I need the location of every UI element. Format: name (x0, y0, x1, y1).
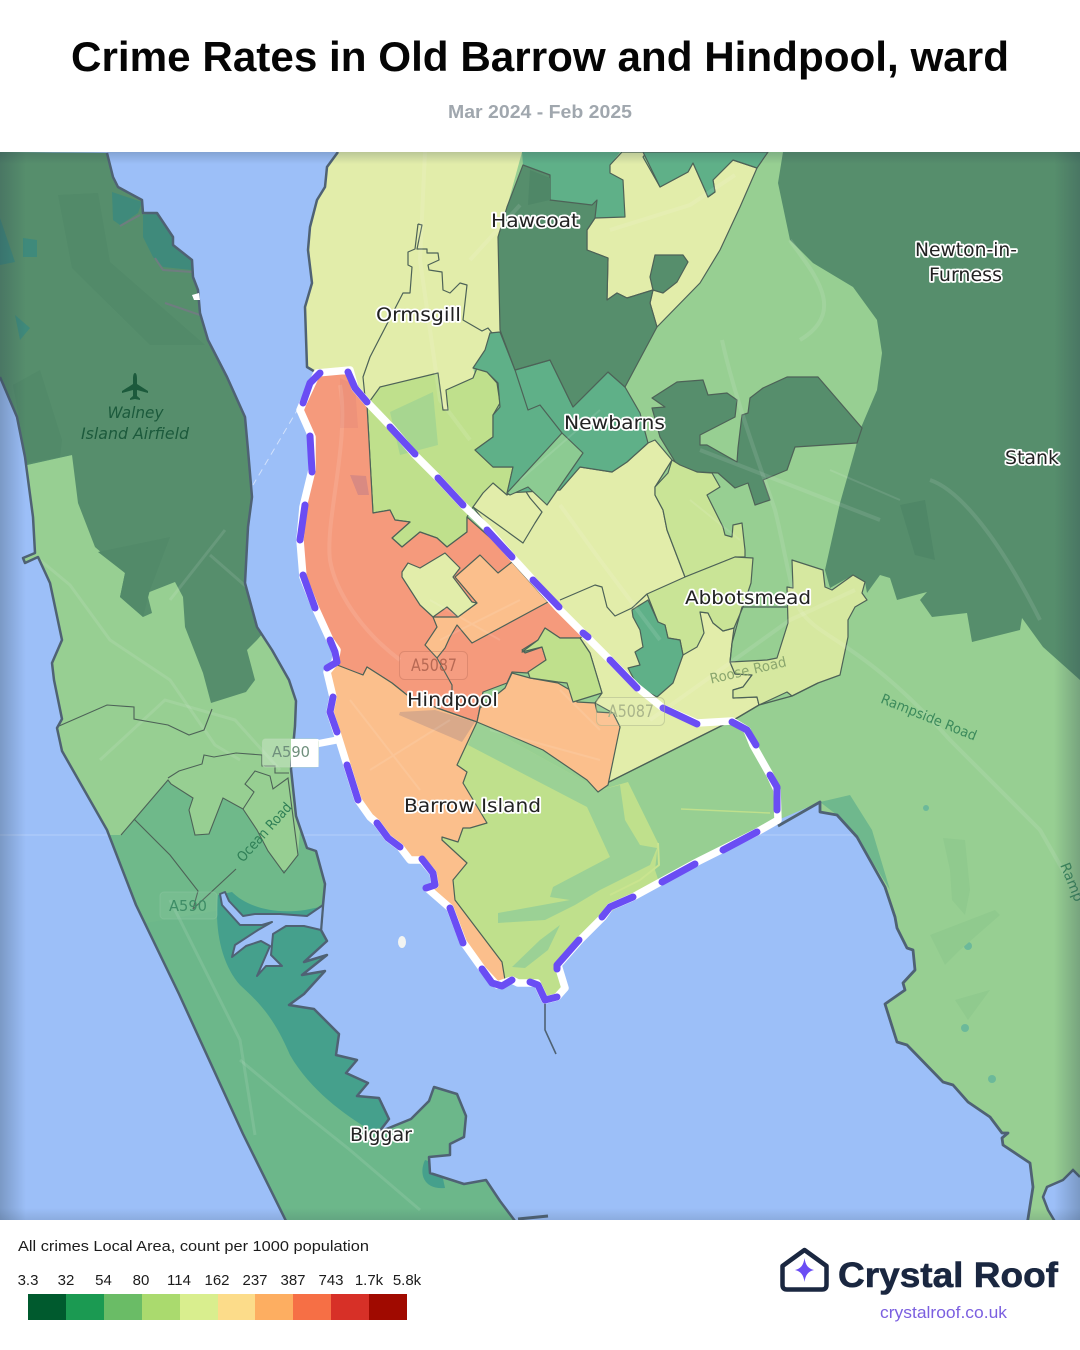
water inlet on southern Walney (220, 892, 323, 976)
darker field patches (780, 838, 1000, 1020)
zone: teal coastal patches (112, 192, 142, 225)
water background (0, 152, 1080, 1220)
zone: teal Newbarns (473, 332, 648, 493)
legend values: 387 (280, 1272, 306, 1289)
legend title: All crimes Local Area, count per 1000 population (18, 1238, 369, 1255)
place label: Hawcoat: Hawcoat (491, 210, 579, 232)
zone: north pale yellow (587, 152, 757, 327)
road shield: A5087 west (400, 652, 468, 680)
roads on mainland (329, 152, 1080, 900)
zone: medium green south of Walney (110, 781, 320, 870)
place label: Hindpool: Hindpool (407, 689, 498, 711)
white islet on Walney coast (192, 293, 200, 300)
zone: Hawcoat dark green (498, 165, 657, 407)
small islet (398, 936, 406, 948)
zone: Abbotsmead yellow-green (647, 557, 753, 655)
purple dashes (300, 372, 777, 1000)
icon: airport plane (122, 373, 148, 400)
zone: Walney central light green (24, 455, 300, 870)
pier line (545, 1003, 556, 1054)
zone: docks darker green (468, 722, 657, 923)
zone: dark green pocket (650, 255, 688, 293)
zone: teal north strip (643, 152, 768, 197)
mainland south-east coastline (778, 802, 1033, 1225)
mainland north coastline (305, 152, 338, 373)
patch: railway block (399, 710, 475, 742)
legend values: 162 (204, 1272, 230, 1289)
zone: south-east dark teal shore (820, 795, 890, 890)
zone: teal north (522, 152, 625, 218)
choropleth map (0, 152, 1080, 1227)
zone: Abbotsmead east pale (730, 560, 867, 705)
zone: orange south-west (331, 665, 506, 981)
road label: Rampside Road: Rampside Road (878, 691, 979, 744)
road shield: A590 bridge: A590 (272, 743, 310, 761)
place label: Biggar: Biggar (350, 1124, 412, 1146)
place label: Newbarns: Newbarns (564, 412, 665, 434)
zone: orange central (425, 555, 548, 658)
legend values (18, 1272, 422, 1289)
zone: Hindpool yellow-green block (522, 628, 602, 702)
zone: pale block inside red (402, 553, 477, 617)
roads on Walney (40, 530, 420, 1210)
zone: Ormsgill pale yellow (300, 152, 522, 420)
legend colour scale (28, 1294, 407, 1320)
label: Walney Island Airfield (81, 403, 190, 443)
zone: teal south of Abbotsmead (628, 600, 683, 697)
zone: Barrow Island yellow-green (442, 722, 660, 1000)
zone: orange south-east (477, 673, 620, 792)
legend values: 80 (133, 1272, 149, 1289)
legend (18, 1238, 422, 1320)
south dividing line (603, 683, 818, 785)
place label: Newton-in-Furness: Newton-in- (915, 239, 1017, 261)
panel: Walney Island (0, 152, 560, 1227)
legend values: 114 (167, 1272, 191, 1289)
ward outline white (300, 370, 778, 1000)
zone: Biggar bay teal patch (422, 1160, 445, 1188)
map edge vignette (0, 152, 1080, 1220)
place label: Newton-in-Furness: Furness (929, 264, 1002, 286)
zone: Abbotsmead west yellow-green (655, 460, 745, 577)
zone: teal sands on southern shore (217, 892, 395, 1130)
zone: dark green east of Newbarns (652, 377, 862, 505)
legend values: 32 (58, 1272, 74, 1289)
legend values: 54 (95, 1272, 112, 1289)
road label: Ocean Road: Ocean Road (234, 800, 295, 866)
road shield: A5087 east (596, 698, 664, 726)
place label: Ormsgill: Ormsgill (376, 304, 461, 326)
logo wordmark: Crystal Roof (838, 1256, 1058, 1295)
road label: Roose Road: Roose Road (708, 654, 788, 688)
zone: central pale yellow east of the diagonal (473, 440, 759, 785)
road shield: A5087 east: A5087 (608, 702, 654, 721)
Walney Island coastline (107, 153, 518, 1225)
title: Crime Rates in Old Barrow and Hindpool, ward (71, 33, 1009, 80)
place label: Stank: Stank (1005, 447, 1059, 469)
place label: Abbotsmead: Abbotsmead (685, 587, 811, 609)
icon: house with star (782, 1250, 826, 1290)
ward boundary: white line with purple dashes (300, 370, 778, 1000)
label: Walney Island Airfield: Walney (108, 403, 164, 422)
road shield: A590 bridge (262, 739, 318, 767)
bridge road to Walney (316, 740, 337, 744)
legend values: 743 (318, 1272, 344, 1289)
zone: Walney north dark green (0, 152, 261, 703)
road shield: A590 south (160, 892, 217, 919)
zone: north-east dark green (778, 152, 1080, 680)
label: Walney Island Airfield: Island Airfield (81, 424, 190, 443)
place label: Newton-in-Furness (915, 239, 1017, 286)
road shield: A590 south: A590 (169, 897, 207, 915)
zone boundaries south Walney (59, 705, 298, 909)
patch: dark pink building block (350, 475, 369, 495)
subtitle: date range: Mar 2024 - Feb 2025 (448, 102, 632, 122)
Ormsgill thin boundary (363, 224, 418, 397)
panel: mainland Barrow zones (290, 152, 1080, 1227)
logo url: crystalroof.co.uk (880, 1304, 1008, 1322)
shadow line on north coast (120, 215, 200, 315)
ponds in south-east (923, 805, 996, 1083)
place label: Barrow Island: Barrow Island (404, 795, 541, 817)
legend values: 3.3 (18, 1272, 38, 1289)
road shield: A5087 west: A5087 (411, 656, 457, 675)
legend values: 237 (242, 1272, 268, 1289)
zone: west yellow-green (367, 368, 513, 547)
zone: lighter green Newbarns wedge (507, 433, 583, 505)
legend values: 5.8k (393, 1272, 422, 1289)
south-east corner bay (1043, 1170, 1080, 1225)
logo: Crystal Roof (782, 1250, 1058, 1322)
zone: Hindpool red-orange (290, 370, 583, 722)
legend values: 1.7k (355, 1272, 384, 1289)
